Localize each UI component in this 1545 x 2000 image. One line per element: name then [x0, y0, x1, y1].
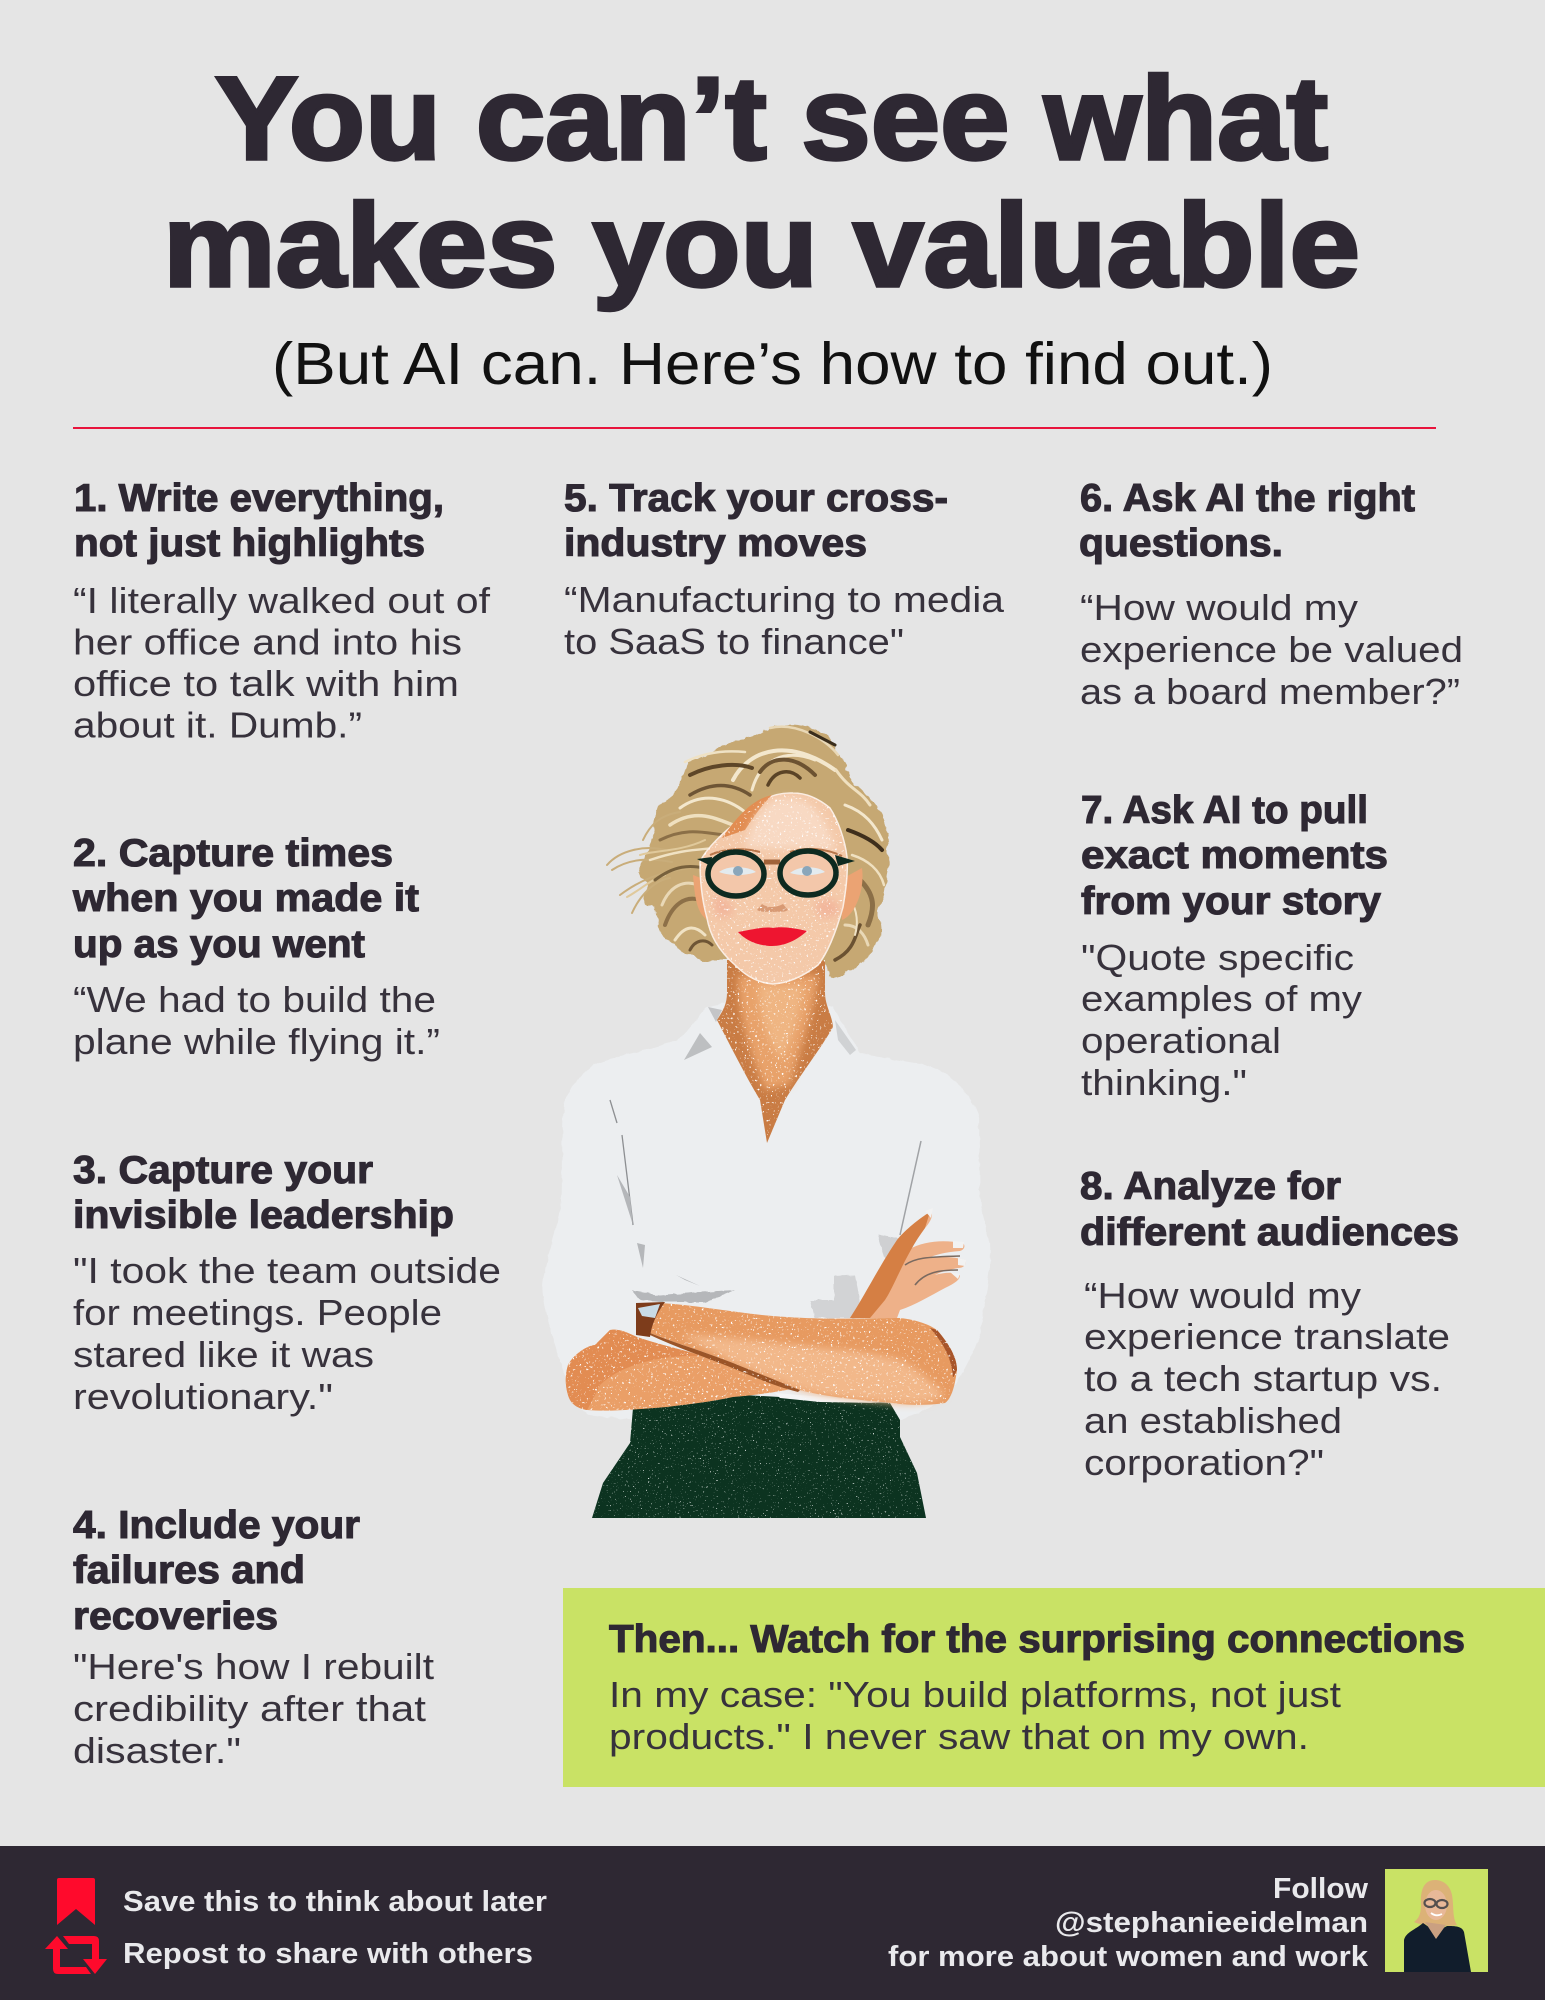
paint speckle: skin [560, 780, 970, 1420]
neck [717, 960, 833, 1143]
face [693, 793, 863, 984]
hand [850, 1208, 966, 1318]
tip 4: recoveries [73, 1595, 278, 1638]
tip 4: 4. Include your [73, 1504, 360, 1547]
tip 1: about it. Dumb.” [73, 704, 362, 746]
follow text: Follow [1273, 1873, 1368, 1905]
tip 1: 1. Write everything, [74, 477, 444, 520]
tip 5: “Manufacturing to media [564, 579, 1005, 620]
tip 7: examples of my [1081, 978, 1362, 1019]
tip 1: not just highlights [74, 522, 425, 565]
tip 7: thinking." [1081, 1062, 1247, 1103]
tip 8 [1080, 1165, 1459, 1483]
tip 6: 6. Ask AI the right [1080, 477, 1415, 520]
tip 1: “I literally walked out of [73, 580, 491, 621]
tip 2: when you made it [72, 877, 419, 920]
tip 8: different audiences [1080, 1211, 1459, 1254]
tip 2: plane while flying it.” [73, 1021, 440, 1062]
tip 6 [1079, 477, 1463, 712]
follow text: for more about women and work [888, 1941, 1369, 1973]
title [163, 53, 1360, 312]
title: You can’t see what [215, 53, 1328, 185]
tip 8: “How would my [1084, 1275, 1361, 1316]
callout: surprising connections: Then... Watch for the surprising connections [609, 1618, 1465, 1661]
tip 3 [73, 1149, 501, 1417]
tip 7: 7. Ask AI to pull [1081, 789, 1368, 832]
tip 2: up as you went [73, 923, 365, 966]
tip 7: operational [1081, 1020, 1281, 1061]
tip 4: failures and [73, 1549, 305, 1592]
tip 8: an established [1084, 1400, 1342, 1441]
watch [636, 1302, 665, 1337]
lower forearm [566, 1330, 800, 1411]
title: makes you valuable [163, 180, 1360, 312]
tip 1: office to talk with him [73, 663, 459, 704]
icon: bookmark [57, 1878, 95, 1925]
tip 5: 5. Track your cross- [564, 477, 948, 520]
tip 1 [73, 477, 491, 746]
tip 6: experience be valued [1080, 629, 1463, 670]
follow text: @stephanieeidelman [1055, 1907, 1368, 1939]
tip 7: exact moments [1081, 834, 1388, 877]
callout: surprising connections: In my case: "You build platforms, not just [609, 1674, 1341, 1715]
panel: right column tips [1079, 477, 1463, 1483]
hair [607, 725, 889, 977]
footer bar [0, 1846, 1545, 2000]
glasses [697, 851, 855, 896]
tip 3: stared like it was [73, 1334, 374, 1375]
illustration: woman with crossed arms [542, 725, 990, 1520]
tip 7: "Quote specific [1081, 937, 1354, 978]
tip 7 [1081, 789, 1388, 1103]
tip 3: "I took the team outside [73, 1250, 501, 1291]
tip 6: questions. [1079, 522, 1283, 565]
tip 8: corporation?" [1084, 1442, 1324, 1483]
tip 3: 3. Capture your [73, 1149, 373, 1192]
callout: surprising connections [563, 1588, 1545, 1787]
tip 1: her office and into his [73, 622, 462, 662]
subtitle: (But AI can. Here’s how to find out.) [272, 331, 1273, 397]
tip 8: 8. Analyze for [1080, 1165, 1341, 1208]
lips [738, 927, 807, 946]
icon: repost [45, 1936, 107, 1974]
tip 4: "Here's how I rebuilt [73, 1646, 434, 1687]
tip 4: disaster." [73, 1730, 241, 1771]
shirt [542, 1000, 990, 1420]
tip 4 [73, 1504, 434, 1771]
tip 8: experience translate [1084, 1316, 1450, 1357]
tip 3: invisible leadership [73, 1194, 454, 1237]
tip 2: “We had to build the [73, 979, 436, 1020]
repost text: Repost to share with others [123, 1938, 533, 1970]
tip 6: “How would my [1080, 587, 1358, 628]
tip 4: credibility after that [73, 1688, 426, 1729]
follow text [888, 1873, 1369, 1973]
tip 8: to a tech startup vs. [1084, 1358, 1442, 1399]
tip 5 [564, 477, 1005, 662]
tip 5: to SaaS to finance" [564, 621, 904, 662]
upper forearm [649, 1303, 957, 1405]
paint speckle: skirt [590, 1395, 930, 1520]
callout: surprising connections: products." I never saw that on my own. [609, 1716, 1309, 1757]
author portrait [1385, 1869, 1488, 1972]
skirt [592, 1395, 926, 1518]
tip 7: from your story [1081, 880, 1381, 923]
tip 6: as a board member?” [1080, 671, 1460, 712]
tip 3: revolutionary." [73, 1376, 333, 1417]
nose [757, 904, 788, 912]
tip 3: for meetings. People [73, 1292, 442, 1333]
tip 2 [72, 832, 440, 1062]
tip 5: industry moves [564, 522, 867, 565]
panel: left column tips [72, 477, 501, 1771]
save text: Save this to think about later [123, 1886, 547, 1918]
tip 2: 2. Capture times [73, 832, 393, 875]
